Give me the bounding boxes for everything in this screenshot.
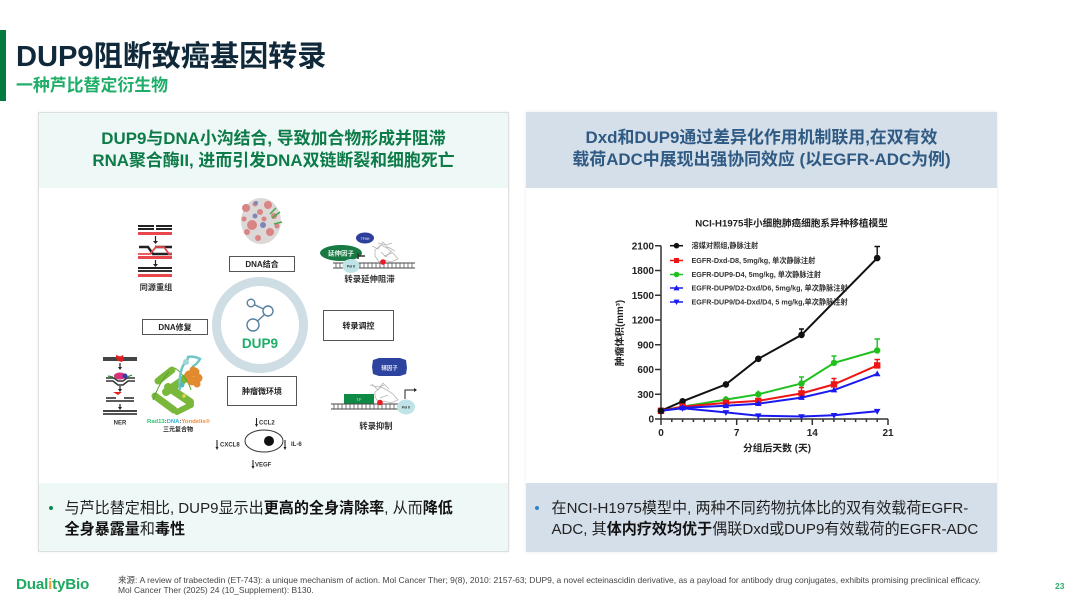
x axis tick labels	[658, 428, 894, 439]
icon: homologous recombination	[138, 225, 172, 292]
y axis tick labels: 1500	[632, 291, 654, 302]
y axis tick labels: 0	[648, 415, 654, 426]
source footnote: Mol Cancer Ther (2025) 24 (10_Supplement): B130.	[118, 585, 314, 595]
icon: ternary complex	[147, 357, 211, 434]
y axis tick labels	[632, 241, 654, 426]
bullet dot	[535, 506, 539, 510]
icon: transcription repression: TF	[357, 397, 362, 402]
series: vehicle control	[658, 246, 880, 414]
panel heading: synergy: Dxd和DUP9通过差异化作用机制联用,在双有效	[586, 128, 937, 147]
x axis tick labels: 21	[882, 428, 894, 439]
takeaway text: ADC, 其体内疗效均优于偶联Dxd或DUP9有效载荷的EGFR-ADC	[552, 521, 978, 538]
legend item: Dxd: EGFR-Dxd-D8, 5mg/kg, 单次静脉注射	[692, 256, 815, 265]
legend item: vehicle: 溶媒对照组,静脉注射	[692, 241, 758, 250]
panel heading: synergy	[526, 112, 997, 188]
x axis tick labels: 14	[807, 428, 818, 439]
label box: tumor microenvironment: 肿瘤微环境	[242, 386, 282, 396]
x axis tick labels: 7	[734, 428, 740, 439]
series: EGFR-DUP9-D4	[661, 339, 880, 411]
DUP9 centre ring: DUP9	[242, 336, 279, 351]
x axis title: 分组后天数 (天)	[743, 442, 811, 454]
y axis tick labels: 2100	[632, 241, 654, 252]
takeaway text	[64, 500, 453, 538]
label box: DNA binding	[230, 256, 294, 272]
y axis tick labels: 1200	[632, 316, 654, 327]
icon: elongation block: TFIIH	[361, 237, 370, 241]
icon: elongation block: 转录延伸阻滞	[344, 274, 395, 284]
panel heading: mechanism: RNA聚合酶II, 进而引发DNA双链断裂和细胞死亡	[92, 151, 455, 170]
icon: cell with cytokines: IL-6	[291, 442, 302, 448]
axes	[655, 246, 888, 425]
label box: DNA repair	[142, 320, 208, 334]
bullet dot	[49, 506, 53, 510]
y axis title: 肿瘤体积(mm³)	[613, 300, 626, 366]
panel: combination synergy	[526, 112, 997, 552]
y axis tick labels: 600	[637, 365, 654, 376]
page number: 23	[1055, 581, 1064, 591]
icon: molecule	[247, 299, 273, 331]
chart title: NCI-H1975非小细胞肺癌细胞系异种移植模型	[695, 218, 888, 230]
icon: cell with cytokines: VEGF	[255, 462, 272, 468]
icon: elongation block: 延伸因子	[328, 248, 354, 258]
icon: ternary complex: 三元复合物	[163, 426, 193, 434]
icon: transcription repression: 转录抑制	[359, 421, 393, 431]
icon: transcription repression: Pol II	[402, 406, 410, 410]
panel footer: clearance takeaway	[39, 483, 508, 551]
icon: NER pathway: NER	[114, 420, 127, 426]
takeaway text: 全身暴露量和毒性	[64, 521, 185, 538]
y axis tick labels: 900	[637, 340, 654, 351]
legend	[670, 241, 848, 306]
series: EGFR-Dxd-D8	[658, 360, 880, 414]
label box: DNA repair: DNA修复	[158, 322, 192, 332]
subtitle: 一种芦比替定衍生物	[16, 76, 168, 95]
takeaway text: 与芦比替定相比, DUP9显示出更高的全身清除率, 从而降低	[64, 500, 453, 516]
panel: DUP9 mechanism	[38, 112, 509, 552]
takeaway text: 在NCI-H1975模型中, 两种不同药物抗体比的双有效载荷EGFR-	[552, 500, 968, 516]
icon: protein surface	[241, 198, 282, 244]
source footnote: 来源: A review of trabectedin (ET-743): a unique mechanism of action. Mol Cancer Ther; 9(8), 2010: 2157-63; DUP9, a novel ecteinascidin derivative, as a payload for antibody drug conjugates, exhibits promising preclinical efficacy.	[118, 575, 981, 585]
legend item: D2-D6: EGFR-DUP9/D2-Dxd/D6, 5mg/kg, 单次静脉注射	[692, 284, 848, 292]
y axis tick labels: 300	[637, 390, 654, 401]
panel heading: mechanism	[39, 113, 508, 188]
label box: tumor microenvironment	[228, 376, 296, 406]
icon: cell with cytokines: CCL2	[259, 420, 275, 426]
icon: homologous recombination: 同源重组	[140, 282, 172, 292]
y axis tick labels: 1800	[632, 266, 654, 277]
series: EGFR-DUP9/D2-Dxd/D6	[661, 370, 880, 411]
legend item: DUP9: EGFR-DUP9-D4, 5mg/kg, 单次静脉注射	[692, 270, 821, 279]
icon: transcription repression: 辅因子	[381, 364, 398, 372]
icon: cell with cytokines	[216, 418, 302, 469]
logo: DualityBio	[16, 576, 89, 593]
icon: cell with cytokines: CXCL8	[220, 442, 240, 448]
chart: tumor volume	[613, 218, 894, 454]
accent bar	[0, 30, 6, 101]
label box: DNA binding: DNA结合	[245, 259, 279, 269]
source footnote	[118, 575, 981, 595]
panel heading: mechanism: DUP9与DNA小沟结合, 导致加合物形成并阻滞	[101, 129, 446, 148]
panel heading: synergy: 载荷ADC中展现出强协同效应 (以EGFR-ADC为例)	[572, 150, 951, 169]
DUP9 centre ring	[216, 282, 304, 368]
x axis tick labels: 0	[658, 428, 664, 439]
takeaway text	[552, 500, 978, 538]
label box: transcription regulation	[324, 310, 394, 340]
label box: transcription regulation: 转录调控	[342, 320, 374, 330]
legend item: D4-D4: EGFR-DUP9/D4-Dxd/D4, 5 mg/kg,单次静脉注射	[692, 298, 848, 306]
title: DUP9阻断致癌基因转录	[16, 41, 326, 73]
panel footer: efficacy takeaway	[526, 483, 997, 552]
icon: transcription repression	[331, 358, 417, 431]
icon: NER pathway	[103, 355, 137, 426]
series: EGFR-DUP9/D4-Dxd/D4	[661, 406, 880, 420]
icon: elongation block: Pol II	[347, 264, 355, 268]
icon: elongation block	[320, 232, 415, 284]
icon: ternary complex: Rad13:DNA:Yondelis®	[147, 418, 211, 425]
